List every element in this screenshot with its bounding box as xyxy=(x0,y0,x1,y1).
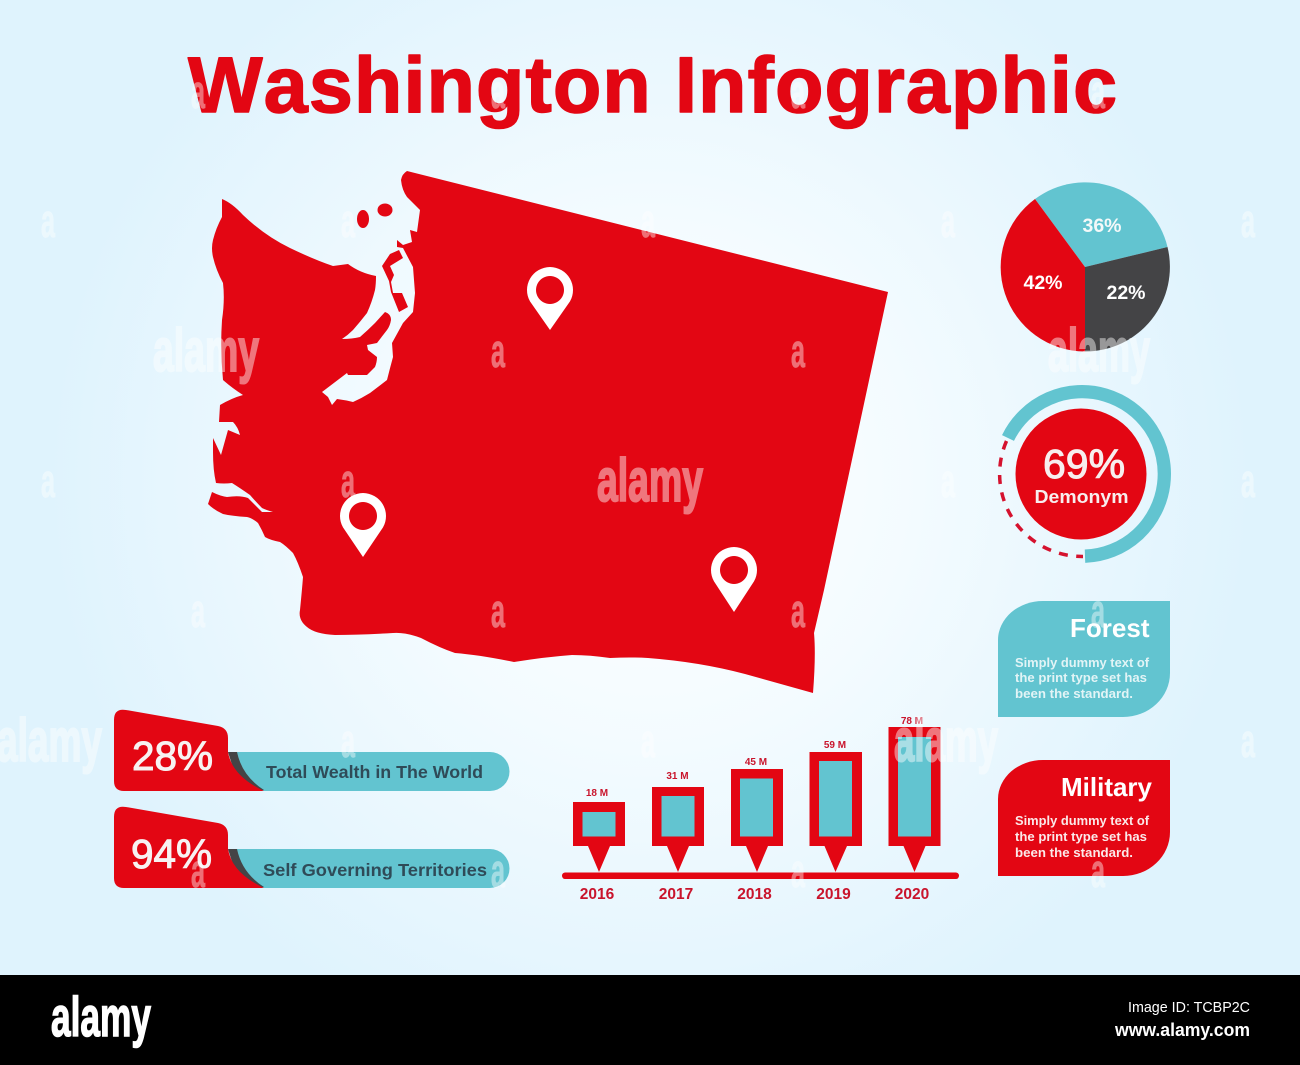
watermarks: a xyxy=(1241,714,1255,767)
footer url: www.alamy.com xyxy=(1114,1020,1250,1040)
card: Military xyxy=(998,760,1170,876)
icon: map pin southeast xyxy=(711,547,757,612)
stat label: Total Wealth in The World xyxy=(266,762,483,782)
watermarks: a xyxy=(191,65,205,118)
watermarks: a xyxy=(1241,454,1255,507)
pie slice: 36% xyxy=(1035,182,1168,267)
pie label: 36%: 36% xyxy=(1082,215,1122,237)
dark fold xyxy=(228,752,264,790)
watermarks: alamy xyxy=(894,707,998,774)
red tab xyxy=(114,807,264,888)
watermarks: a xyxy=(491,324,505,377)
bar 2016: 2016 xyxy=(580,886,615,903)
dark fold xyxy=(228,849,264,887)
card text: Military xyxy=(1015,814,1150,860)
watermarks: a xyxy=(341,454,355,507)
watermarks: a xyxy=(791,584,805,637)
bar 2020: 2020 xyxy=(895,886,929,903)
watermarks: a xyxy=(1091,844,1105,897)
bar 2019 xyxy=(810,740,862,903)
card heading: Forest: Forest xyxy=(1070,613,1150,643)
watermarks: a xyxy=(791,65,805,118)
bar 2019: 59 M xyxy=(824,740,846,751)
card text: Military: the print type set has xyxy=(1015,830,1147,844)
bar 2017: 31 M xyxy=(666,771,689,782)
gauge label: Demonym xyxy=(1034,486,1128,507)
teal band xyxy=(228,849,510,888)
watermarks: a xyxy=(641,714,655,767)
pie label: 42%: 42% xyxy=(1023,272,1063,294)
bar 2016: 18 M xyxy=(586,788,608,799)
card: Forest xyxy=(998,601,1170,717)
card text: Forest xyxy=(1015,656,1150,701)
map: Washington state xyxy=(208,171,888,693)
card text: Forest: the print type set has xyxy=(1015,671,1147,685)
watermarks: alamy xyxy=(1048,317,1150,384)
bar 2019: 2019 xyxy=(816,886,851,903)
card heading: Military: Military xyxy=(1061,772,1153,802)
pie chart xyxy=(1001,182,1170,352)
watermarks: a xyxy=(191,584,205,637)
island: Puget Sound xyxy=(382,250,408,312)
bar 2016 xyxy=(573,788,625,903)
stat value: 28% xyxy=(132,733,213,779)
watermarks: alamy xyxy=(0,707,102,774)
watermarks: a xyxy=(491,584,505,637)
bar 2018 xyxy=(731,757,783,903)
watermarks: a xyxy=(1091,584,1105,637)
card text: Forest: been the standard. xyxy=(1015,687,1133,701)
watermarks: a xyxy=(941,454,955,507)
card text: Military: Simply dummy text of xyxy=(1015,814,1150,828)
gauge value: 69% xyxy=(1043,441,1125,487)
pie label: 22%: 22% xyxy=(1106,282,1146,304)
bar 2018: 45 M xyxy=(745,757,767,768)
radial gauge: 69% Demonym xyxy=(1000,392,1164,557)
chart baseline xyxy=(562,872,959,879)
watermarks: a xyxy=(641,194,655,247)
red tab xyxy=(114,710,264,791)
bar chart: 2016 to 2020 xyxy=(562,716,959,903)
footer logo: alamy xyxy=(51,985,151,1048)
watermarks xyxy=(0,65,1255,897)
watermarks: a xyxy=(791,324,805,377)
gauge centre disc xyxy=(1016,408,1146,540)
watermarks: a xyxy=(1241,194,1255,247)
title: Washington Infographic xyxy=(188,40,1117,129)
island: San Juan east xyxy=(378,204,392,216)
watermarks: a xyxy=(941,194,955,247)
watermarks: alamy xyxy=(597,447,703,514)
pie slice: 42% xyxy=(1001,199,1085,352)
icon: map pin west xyxy=(340,493,386,557)
stat bar: 28% Total Wealth xyxy=(114,710,510,791)
bar 2017: 2017 xyxy=(659,886,693,903)
watermarks: a xyxy=(191,844,205,897)
island: San Juan west xyxy=(357,210,369,228)
bar 2017 xyxy=(652,771,704,903)
icon: map pin north xyxy=(527,267,573,330)
card text: Forest: Simply dummy text of xyxy=(1015,656,1150,670)
stat label: Self Governing Territories xyxy=(263,860,487,880)
watermarks: a xyxy=(1091,65,1105,118)
footer image id: Image ID: TCBP2C xyxy=(1128,999,1250,1016)
watermarks: a xyxy=(491,65,505,118)
stat value: 94% xyxy=(131,831,212,877)
watermarks: a xyxy=(491,844,505,897)
watermarks: a xyxy=(41,194,55,247)
gauge remainder dashed xyxy=(1000,441,1083,557)
teal band xyxy=(228,752,510,791)
watermarks: alamy xyxy=(153,317,259,384)
bar 2020: 78 M xyxy=(901,716,923,727)
watermarks: a xyxy=(341,714,355,767)
footer bar xyxy=(0,975,1300,1065)
watermarks: a xyxy=(341,194,355,247)
pie slice: 22% xyxy=(1085,247,1170,352)
bar 2018: 2018 xyxy=(737,886,772,903)
watermarks: a xyxy=(41,454,55,507)
gauge arc xyxy=(1008,392,1164,556)
card text: Military: been the standard. xyxy=(1015,846,1133,860)
stat bar: 94% Self Governing Territories xyxy=(114,807,510,888)
bar 2020 xyxy=(888,716,940,903)
watermarks: a xyxy=(791,844,805,897)
